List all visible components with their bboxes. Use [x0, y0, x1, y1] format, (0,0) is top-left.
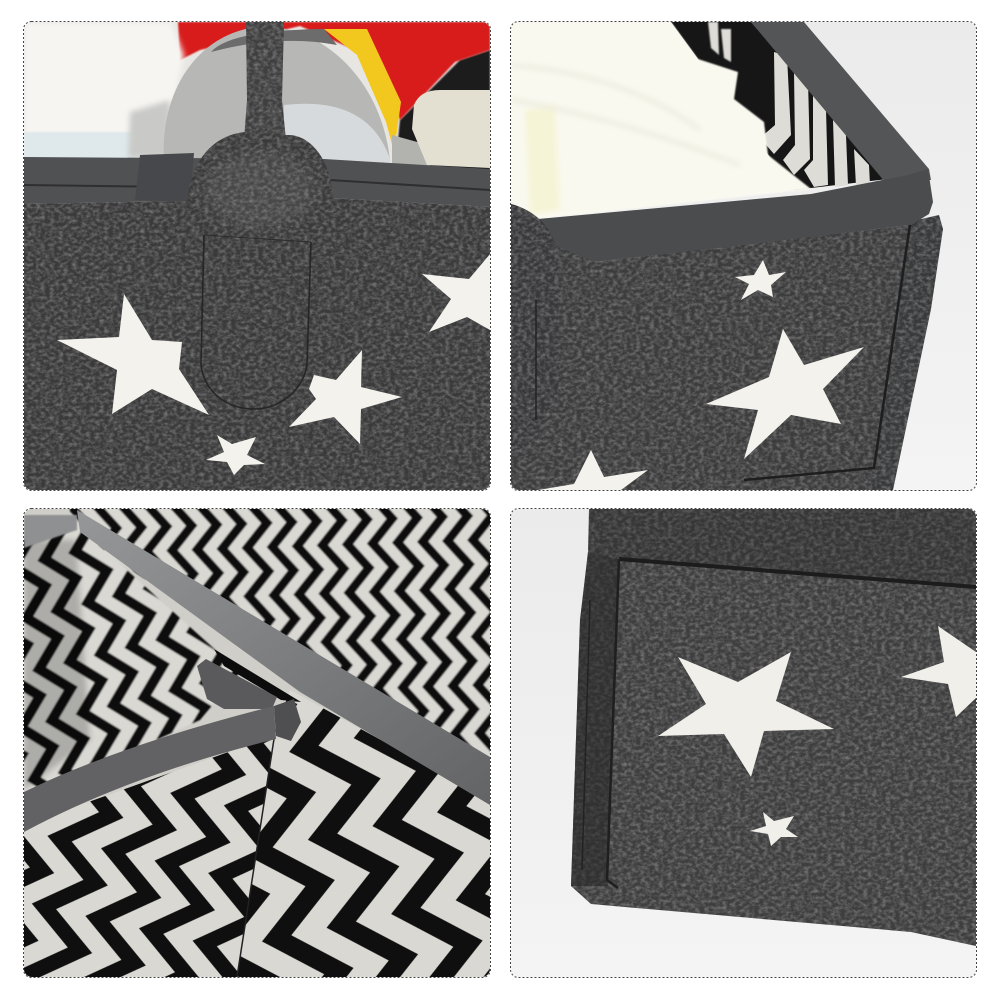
star: large [706, 329, 864, 459]
seam at the corner [744, 225, 910, 480]
felt body [571, 509, 976, 946]
handle tab [188, 132, 334, 410]
front divider binding [24, 706, 276, 832]
star: small top [735, 260, 786, 300]
star: right edge [901, 626, 976, 717]
inner chevron lining [671, 22, 888, 190]
lower left compartment lining [24, 735, 276, 977]
left wall shadow [24, 540, 90, 790]
panel: chevron lining close-up [20, 500, 500, 977]
star: large [658, 652, 834, 777]
nappies [511, 22, 811, 219]
panel: corner close-up [511, 22, 976, 490]
star: small [750, 812, 798, 846]
binding knot [274, 699, 301, 741]
binding strip [24, 153, 490, 207]
star: large left [57, 294, 209, 415]
upper pocket shading [589, 509, 976, 587]
left seam [571, 552, 619, 888]
handle tab edge [511, 204, 555, 420]
felt front [24, 198, 490, 490]
dark gap under the rim [214, 649, 301, 702]
divider tab [197, 659, 277, 709]
star: cropped bottom [538, 450, 648, 490]
long diagonal binding [77, 510, 490, 805]
left wall lining [20, 528, 240, 800]
panel: side pocket close-up [511, 509, 976, 977]
star: small bottom [206, 435, 265, 475]
back wall lining [69, 509, 490, 756]
top-left rim [24, 515, 77, 548]
felt side face [880, 215, 943, 490]
seam between compartments [237, 739, 274, 977]
handle strap [244, 22, 286, 140]
far rim binding [751, 22, 931, 182]
background contents of the caddy [24, 22, 490, 170]
star: right edge [422, 254, 490, 332]
star: centre right [289, 350, 402, 444]
pocket top line [619, 559, 976, 587]
lower right compartment lining [237, 690, 490, 977]
panel: handle and stars close-up [24, 22, 490, 490]
near rim binding [538, 169, 933, 262]
felt front face [511, 204, 911, 490]
